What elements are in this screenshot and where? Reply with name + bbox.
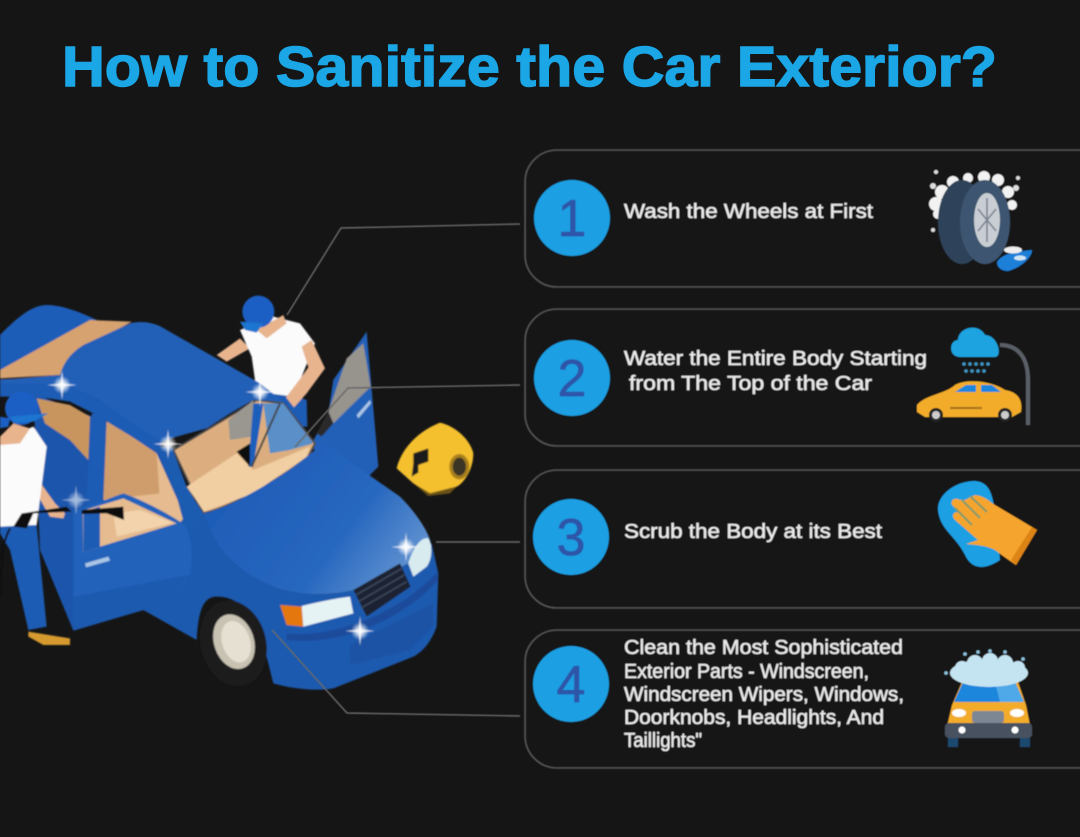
icon: foamy car front	[944, 649, 1032, 747]
illustration: car with two workers	[0, 296, 473, 694]
side interior	[37, 398, 185, 547]
roof rear section	[0, 305, 100, 370]
text 4: Exterior Parts - Windscreen,	[624, 661, 869, 683]
roof tan opening	[0, 320, 132, 378]
number 1	[534, 180, 610, 256]
roof side rail	[0, 378, 163, 452]
text 4: Doorknobs, Headlights, And	[624, 707, 884, 729]
right headlight	[408, 538, 431, 577]
pressure washer	[397, 423, 473, 496]
text 1: Wash the Wheels at First	[624, 201, 873, 223]
number 1: 1	[558, 190, 586, 248]
text 4: Taillights"	[624, 730, 702, 752]
icon: car under rain cloud	[917, 328, 1028, 425]
panel 3	[525, 470, 1080, 608]
title: How to Sanitize the Car Exterior?	[62, 35, 997, 99]
text 3: Scrub the Body at its Best	[624, 521, 882, 543]
bumper lip	[287, 572, 438, 641]
number 3	[533, 499, 609, 575]
A pillar	[157, 447, 213, 547]
panel 2	[525, 309, 1080, 446]
sparkles	[47, 370, 421, 646]
number 2	[534, 340, 610, 416]
number 4: 4	[557, 656, 585, 714]
lower body	[143, 513, 438, 690]
text 2: Water the Entire Body Starting	[624, 348, 927, 370]
near open door	[73, 493, 192, 631]
front bumper shade	[350, 603, 433, 665]
windscreen and interior	[173, 400, 315, 513]
number 2: 2	[558, 350, 586, 408]
open door, far side	[310, 332, 378, 477]
grille	[353, 563, 411, 617]
worker behind car	[217, 296, 325, 427]
number 3: 3	[557, 509, 585, 567]
text 2	[624, 348, 927, 395]
main roof	[0, 322, 283, 442]
text 4: Clean the Most Sophisticated	[624, 637, 903, 659]
car side cabin and lower	[33, 393, 190, 631]
front wheel	[191, 593, 276, 694]
icon: glove and sponge	[938, 481, 1037, 567]
panel 4	[525, 630, 1080, 768]
headlight	[280, 597, 353, 627]
number 4	[533, 646, 609, 722]
worker in front	[0, 392, 124, 645]
text 2: from The Top of the Car	[629, 373, 872, 395]
connector lines	[272, 224, 520, 716]
text 4	[624, 637, 904, 752]
icon: wheel with foam	[929, 170, 1032, 271]
panel 1	[525, 150, 1080, 287]
hood	[203, 440, 432, 594]
text 4: Windscreen Wipers, Windows,	[624, 684, 904, 706]
